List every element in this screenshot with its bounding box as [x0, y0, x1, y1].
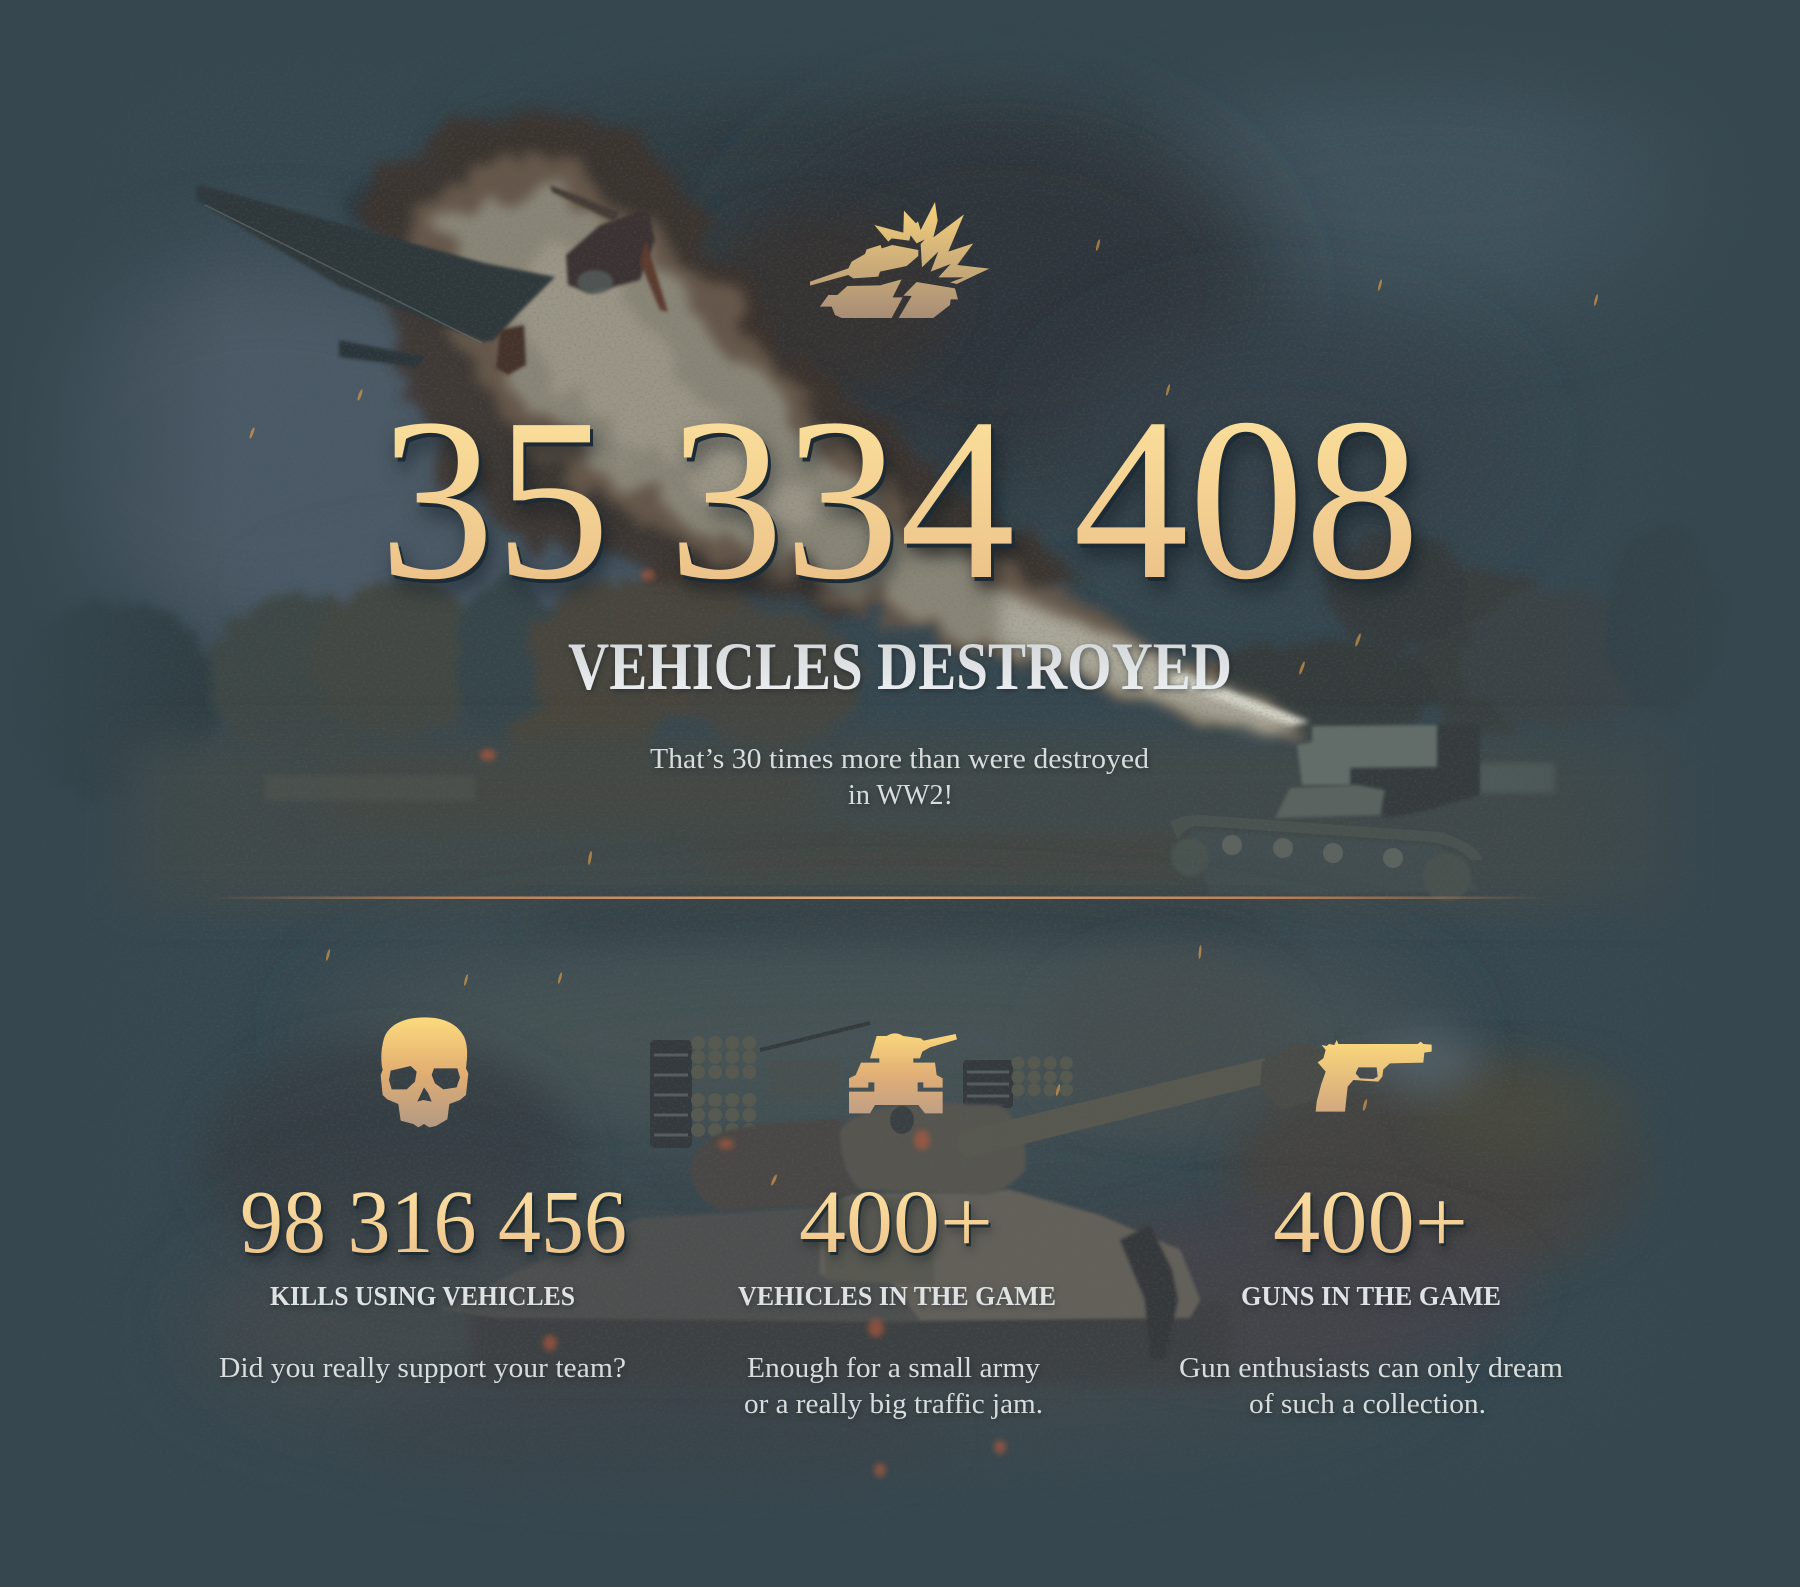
icon: tank — [849, 1033, 957, 1113]
heading: vehicles destroyed: VEHICLES DESTROYED — [568, 628, 1232, 704]
text block: main description: in WW2! — [848, 780, 953, 811]
ground — [120, 740, 1680, 905]
background scene: lower battlefield — [180, 930, 1650, 1500]
divider shadow — [520, 903, 1280, 947]
stat: kills number: 98 316 456 — [240, 1173, 627, 1272]
trees — [0, 525, 1725, 800]
background scene: upper battlefield — [0, 70, 1725, 905]
divider line — [207, 896, 1550, 899]
turret — [690, 1118, 860, 1210]
text: vehicles description: Enough for a small army — [747, 1353, 1040, 1384]
panel: kills — [219, 1017, 627, 1384]
text block: main description: That’s 30 times more than were destroyed — [650, 744, 1149, 775]
icon: tank explosion — [810, 202, 989, 318]
panel: vehicles — [738, 1033, 1056, 1420]
text: vehicles description: or a really big traffic jam. — [744, 1389, 1043, 1420]
main tank hull — [440, 1190, 1200, 1322]
ember sparks — [249, 239, 1599, 1477]
stat: vehicles label: VEHICLES IN THE GAME — [738, 1281, 1056, 1311]
plane wreck — [196, 185, 668, 375]
stat: kills label: KILLS USING VEHICLES — [270, 1281, 575, 1311]
stat: vehicles number: 400+ — [799, 1173, 993, 1272]
lower hull shadow — [470, 1300, 1230, 1385]
background scene: fire plume and explosion — [360, 110, 1310, 735]
text: vehicles description — [744, 1353, 1043, 1420]
panel: guns — [1179, 1040, 1563, 1420]
tank with flamethrower — [1170, 723, 1555, 901]
text block: main description — [650, 744, 1149, 811]
gun barrel — [956, 1058, 1272, 1158]
text: kills description: Did you really support your team? — [219, 1353, 626, 1384]
text: guns description: Gun enthusiasts can only dream — [1179, 1353, 1563, 1384]
text: guns description — [1179, 1353, 1563, 1420]
stat: guns label: GUNS IN THE GAME — [1241, 1281, 1501, 1311]
text: guns description: of such a collection. — [1249, 1389, 1486, 1420]
icon: pistol — [1316, 1040, 1432, 1112]
rocket racks — [650, 1023, 1068, 1148]
stat: guns number: 400+ — [1273, 1173, 1468, 1272]
soldier — [1120, 1225, 1178, 1360]
icon: skull — [381, 1017, 468, 1127]
main number: 35 334 408 — [379, 371, 1420, 628]
